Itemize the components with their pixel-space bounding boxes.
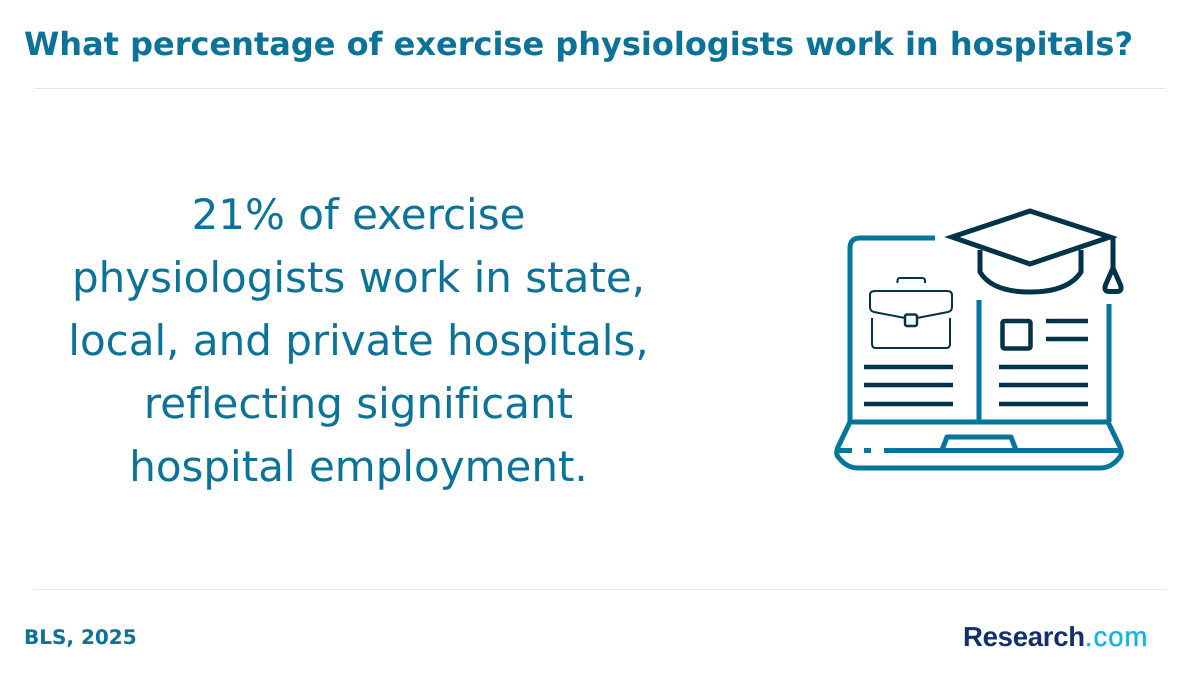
graduation cap [946, 211, 1121, 292]
source: BLS, 2025 [24, 625, 137, 649]
statement text: reflecting significant [144, 379, 573, 428]
statement text: hospital employment. [129, 442, 588, 491]
title: What percentage of exercise physiologists work in hospitals? [24, 25, 1133, 63]
briefcase [870, 278, 952, 348]
statement text: physiologists work in state, [72, 253, 645, 302]
logo: Research.com [963, 621, 1148, 652]
laptop screen and base [836, 238, 1122, 468]
statement text: 21% of exercise [192, 190, 525, 239]
text lines [864, 321, 1088, 404]
icon: laptop with graduation cap [834, 208, 1124, 470]
statement text [68, 190, 649, 491]
statement text: local, and private hospitals, [68, 316, 649, 365]
